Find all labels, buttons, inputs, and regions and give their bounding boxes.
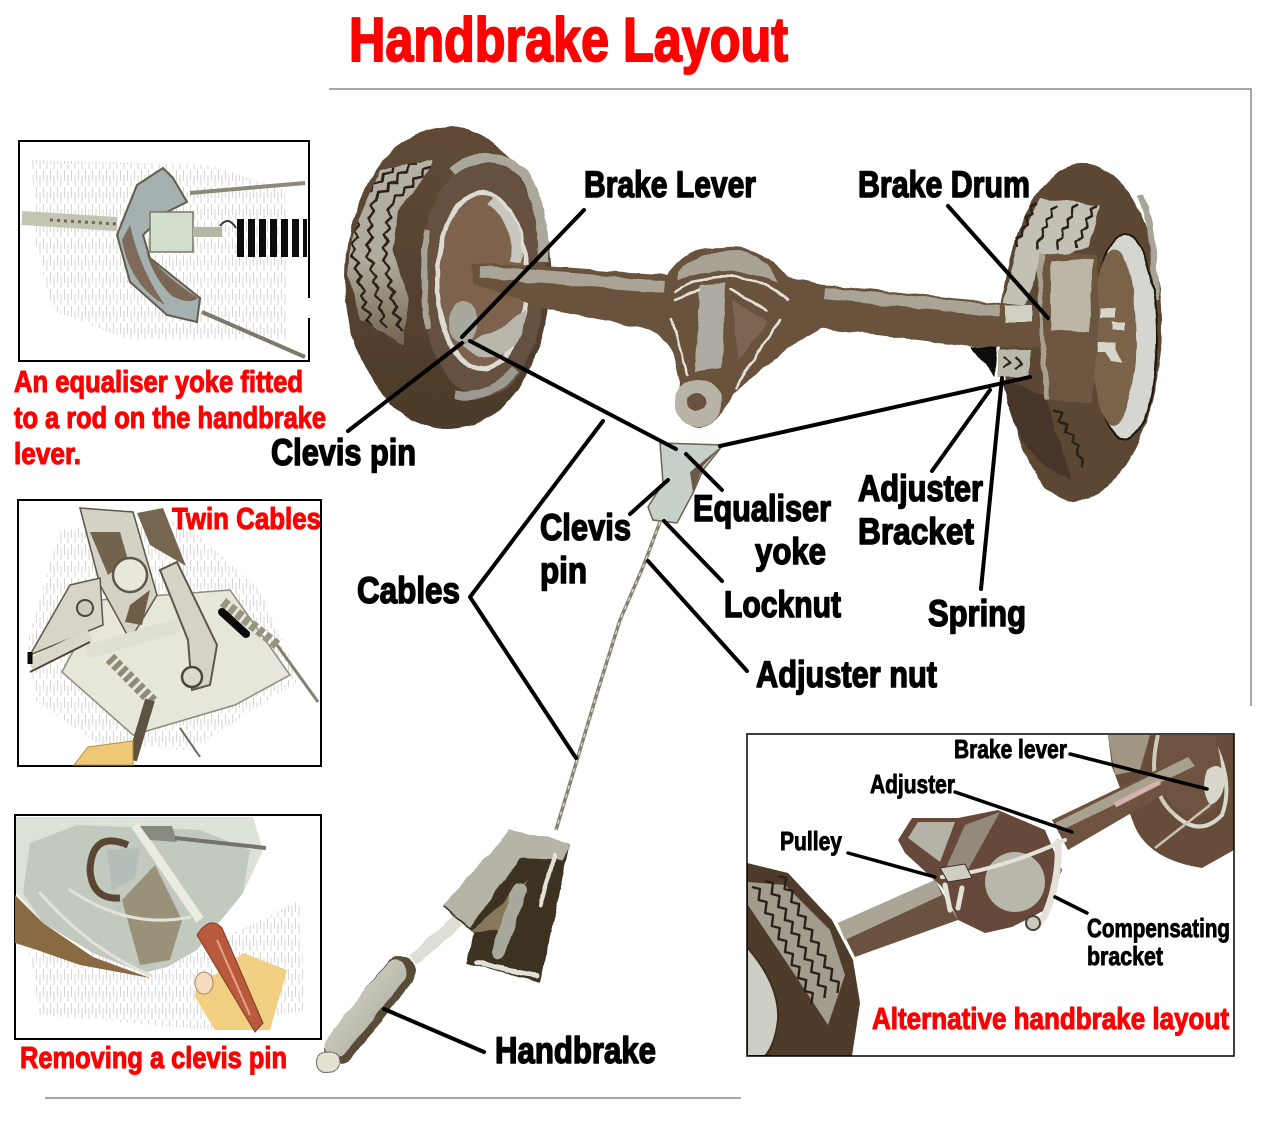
leader lines xyxy=(848,754,1207,913)
axle labels: Handbrake xyxy=(495,1030,656,1071)
illustration: near wheel xyxy=(747,863,860,1056)
axle labels: yoke xyxy=(755,531,826,572)
heading: twin cables: Twin Cables xyxy=(172,501,321,536)
panel border xyxy=(747,734,1234,1056)
axle labels xyxy=(271,164,1030,1071)
axle labels: Clevis xyxy=(540,507,631,548)
labels: Pulley xyxy=(780,826,842,856)
axle labels: Spring xyxy=(928,593,1026,634)
axle labels: Locknut xyxy=(724,584,841,625)
title: Handbrake Layout xyxy=(349,6,788,75)
illustration: twin cable linkage xyxy=(30,508,318,765)
axle labels: Clevis pin xyxy=(271,432,416,473)
panel: alternative handbrake layout xyxy=(747,734,1234,1056)
labels: Brake lever xyxy=(954,734,1067,764)
illustration: rear axle with wheels xyxy=(336,127,1162,501)
caption: equaliser yoke: An equaliser yoke fitted xyxy=(14,364,303,399)
axle labels: Brake Drum xyxy=(858,164,1030,205)
tread grooves xyxy=(350,162,432,332)
gap in the frame xyxy=(304,298,312,318)
axle labels: Brake Lever xyxy=(584,164,756,205)
caption: equaliser yoke: to a rod on the handbrake xyxy=(14,400,326,435)
caption: removing a clevis pin: Removing a clevis pin xyxy=(20,1040,287,1075)
labels: bracket xyxy=(1087,941,1163,971)
illustration: right wheel xyxy=(999,163,1162,501)
panel: removing a clevis pin xyxy=(15,815,321,1039)
axle labels: Bracket xyxy=(858,511,974,552)
illustration: equaliser yoke, cable and adjuster xyxy=(556,443,723,830)
illustration: left wheel xyxy=(336,127,551,429)
illustration: axle xyxy=(838,755,1205,957)
caption: equaliser yoke: lever. xyxy=(14,436,81,471)
leader lines xyxy=(348,206,1048,1052)
labels: Adjuster xyxy=(870,769,955,799)
panel: equaliser yoke xyxy=(19,141,312,361)
axle labels: Adjuster nut xyxy=(756,654,937,695)
panel: twin cables xyxy=(18,500,321,766)
illustration: drum, pin and fingers xyxy=(15,817,287,1032)
axle labels: Equaliser xyxy=(693,488,831,529)
labels xyxy=(780,734,1230,971)
illustration: yoke on rod xyxy=(22,168,307,357)
illustration: differential xyxy=(898,810,1065,933)
illustration: axle tube and differential xyxy=(472,247,1040,427)
axle labels: pin xyxy=(540,550,587,591)
axle labels: Cables xyxy=(357,570,460,611)
illustration: handbrake lever xyxy=(316,830,570,1073)
axle labels: Adjuster xyxy=(858,468,983,509)
illustration: far wheel xyxy=(1108,735,1234,868)
caption: equaliser yoke xyxy=(14,364,326,471)
illustration: alternative axle xyxy=(747,735,1234,1056)
